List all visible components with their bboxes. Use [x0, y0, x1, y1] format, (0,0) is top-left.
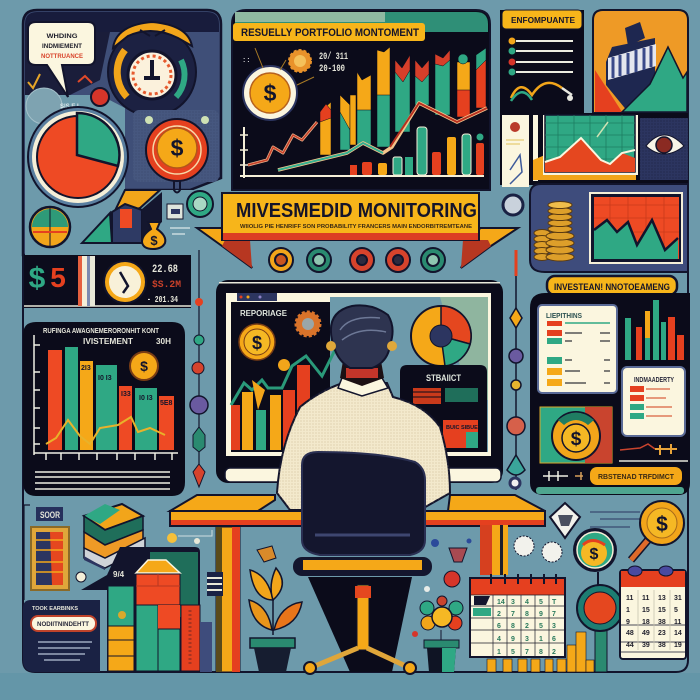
title: MIVESMEDID MONITORING	[236, 200, 477, 222]
plant right	[420, 596, 463, 672]
calendar center: 9	[511, 636, 515, 643]
calendar center: 5	[539, 599, 543, 606]
icon row	[269, 248, 445, 272]
calendar center: T	[552, 599, 557, 606]
coin picture: $	[571, 429, 582, 450]
icon: books stack	[84, 504, 145, 570]
panel: balance strip: $S.2M	[152, 279, 181, 291]
icon: money bag: $	[150, 233, 158, 248]
calendar center: 14	[497, 599, 505, 606]
coin picture	[540, 407, 612, 463]
table card	[538, 305, 617, 393]
calendar right: 31	[674, 595, 682, 602]
shirt	[277, 383, 450, 510]
desk leg left	[216, 527, 240, 672]
bar numbers: I0 I3	[98, 375, 112, 382]
screen coin	[239, 324, 275, 360]
screen panel: stbaiict: BUIC SIBUE	[446, 425, 478, 431]
calendar center: 2	[552, 649, 556, 656]
panel: building illustration	[593, 10, 688, 113]
bar numbers	[81, 365, 173, 407]
magnifier with coin	[573, 528, 617, 585]
calendar right: 23	[658, 630, 666, 637]
chart numbers: 20-100	[319, 64, 345, 75]
calendar center: 1	[497, 649, 501, 656]
calendar right: 9	[626, 619, 630, 626]
pill label	[590, 467, 682, 485]
bar strip	[487, 632, 594, 672]
panel: balance strip: 5	[50, 262, 66, 293]
footer lines	[35, 472, 170, 489]
magnifier with coin: $	[590, 546, 599, 563]
small marks	[26, 74, 109, 124]
panel: investment bar chart	[23, 322, 185, 496]
coin	[243, 48, 314, 120]
calendar center: 6	[552, 636, 556, 643]
panel: top left dashboard	[23, 10, 221, 255]
large magnifier: $	[656, 513, 668, 536]
panel: balance strip	[24, 255, 191, 308]
panel: balance strip: - 201.34	[147, 295, 178, 305]
axes	[34, 335, 178, 460]
mini bars	[625, 300, 684, 360]
bar numbers: I33	[121, 391, 131, 398]
calendar center: 4	[497, 636, 501, 643]
calendar right: 38	[658, 619, 666, 626]
calendar center: 5	[539, 623, 543, 630]
speech bubble: NOTTRUANCE	[41, 53, 84, 60]
coin	[130, 352, 158, 380]
coin: $	[264, 80, 277, 106]
chart titles: RUFINGA AWAGNEMERORONHIT KONT	[43, 328, 160, 335]
calendar center	[470, 574, 565, 657]
coin panel: $	[171, 135, 184, 161]
block chart: 9/4	[113, 570, 125, 579]
icon: ledger card	[31, 527, 69, 590]
calendar right: 15	[642, 607, 650, 614]
screen bars	[231, 350, 335, 450]
panel: balance strip: 22.68	[152, 264, 178, 276]
gear: : :	[243, 57, 250, 64]
card: indmaadernty: INDMAADERTY	[634, 377, 674, 384]
chair legs	[308, 577, 412, 672]
panel: text note	[23, 600, 100, 672]
small markers left	[76, 530, 276, 582]
panel: monitor chart row	[500, 113, 688, 187]
icon: house with roof chart	[82, 190, 162, 243]
calendar right: 49	[642, 630, 650, 637]
calendar right: 19	[674, 642, 682, 649]
chart numbers: 20/ 311	[319, 51, 348, 63]
subtitle: WIIOLIG PIE HENRIFF SON PROBABILITY FRANCERS MAIN ENDORBITREMTEANE	[240, 224, 472, 230]
calendar right: 11	[674, 619, 682, 626]
pill: NODIITNINDEHTT	[37, 621, 89, 628]
gear	[243, 50, 311, 72]
label: soor: SOOR	[40, 510, 60, 520]
label: ENFOMPUANTE	[511, 16, 576, 25]
calendar right: 44	[626, 642, 634, 649]
desk	[170, 495, 545, 672]
person at desk	[277, 305, 450, 510]
calendar center: 9	[539, 611, 543, 618]
bar numbers: 5E8	[160, 400, 173, 407]
head	[331, 305, 393, 368]
connector: left beads	[190, 250, 208, 487]
heading: right panel label: INVESTEAN! NNOTOEAMENG	[554, 282, 670, 293]
calendar center: 2	[525, 623, 529, 630]
calendar right: 1	[626, 607, 630, 614]
calendar center: 8	[525, 611, 529, 618]
label: soor	[24, 505, 63, 600]
bar numbers: 2I3	[81, 365, 91, 372]
panel: entries list	[500, 10, 584, 113]
coin stacks	[534, 202, 574, 261]
panel: text note: TOOK EARBINKS	[32, 606, 78, 612]
magnifier red lens	[577, 585, 623, 672]
connector: right beads	[503, 195, 525, 490]
armrest	[293, 557, 432, 576]
line chart	[533, 115, 638, 181]
calendar right: 11	[642, 595, 650, 602]
trend line	[46, 417, 165, 444]
table card: LIEPITHINS	[546, 313, 582, 320]
screen panel: stbaiict	[400, 365, 487, 452]
calendar right: 38	[658, 642, 666, 649]
icon: money bag	[142, 222, 165, 249]
note card	[502, 115, 529, 187]
calendar center: 3	[525, 636, 529, 643]
panel: investment report	[530, 293, 690, 495]
banner tail: right	[461, 228, 518, 268]
panel: portfolio chart	[232, 10, 490, 190]
calendar right: 5	[674, 607, 678, 614]
panel: coins and market chart	[530, 184, 688, 272]
list rows	[508, 38, 573, 76]
collar	[338, 378, 388, 396]
trend lines	[248, 103, 487, 170]
calendar right: 11	[626, 595, 634, 602]
calendar center: 7	[511, 611, 515, 618]
market chart	[590, 193, 682, 263]
speech bubble: WHDING	[46, 33, 78, 40]
icon: globe	[30, 207, 70, 247]
bars	[48, 347, 174, 450]
tall bars	[320, 47, 486, 155]
icon: diamond badge	[514, 503, 640, 562]
panel: balance strip: $	[29, 262, 46, 295]
monitor	[216, 280, 503, 483]
bar numbers: I0 I3	[139, 395, 153, 402]
calendar center: 5	[511, 649, 515, 656]
heading: chart label	[233, 23, 425, 41]
chart titles: 30H	[156, 337, 171, 346]
office chair	[293, 452, 432, 674]
calendar center: 1	[539, 636, 543, 643]
coin: $	[140, 358, 148, 374]
gear	[296, 312, 320, 336]
calendar right: 18	[642, 619, 650, 626]
calendar right: 48	[626, 630, 634, 637]
pill label: RBSTENAD TRFDIMCT	[598, 472, 674, 481]
calendar center: 4	[525, 599, 529, 606]
eye panel	[640, 118, 688, 180]
heading: chart label: RESUELLY PORTFOLIO MONTOMENT	[241, 27, 419, 39]
chair backrest	[302, 452, 425, 555]
calendar center: 3	[511, 599, 515, 606]
calendar center: 7	[552, 611, 556, 618]
calendar right: 15	[658, 607, 666, 614]
small markers center	[412, 538, 472, 637]
shirt shading	[277, 383, 450, 510]
calendar center: 8	[511, 623, 515, 630]
chart titles: IVISTEMENT	[83, 337, 133, 346]
plant left	[249, 568, 302, 672]
neck	[340, 355, 384, 386]
pluses	[543, 471, 583, 481]
block chart	[81, 547, 223, 672]
donut chart	[411, 306, 471, 366]
calendar right: 13	[658, 595, 666, 602]
calendar center: 3	[552, 623, 556, 630]
calendar right: 39	[642, 642, 650, 649]
pedestal	[304, 585, 416, 674]
calendar center: 7	[525, 649, 529, 656]
banner tail: left	[197, 228, 252, 268]
sparkline	[619, 444, 688, 461]
speech bubble: INDMIEMENT	[42, 43, 82, 50]
desk leg right	[480, 525, 508, 575]
calendar center: 2	[497, 611, 501, 618]
coin panel	[133, 110, 219, 192]
title banner	[222, 193, 479, 240]
icon: clock	[104, 261, 146, 303]
icon: alarm clock	[108, 22, 196, 116]
calendar center: 8	[539, 649, 543, 656]
squiggle	[511, 83, 573, 101]
small badges	[167, 191, 213, 234]
speech bubble	[28, 22, 95, 97]
large magnifier	[631, 501, 684, 560]
card: indmaadernty	[622, 367, 685, 436]
small marks: S|S E L	[60, 104, 81, 110]
calendar center: 6	[497, 623, 501, 630]
low bars	[350, 127, 484, 175]
calendar right	[620, 566, 686, 659]
screen coin: $	[252, 333, 262, 353]
axes	[240, 127, 484, 178]
pie chart	[28, 107, 128, 207]
calendar right: 14	[674, 630, 682, 637]
chart numbers	[319, 51, 348, 75]
screen panel: stbaiict: STBAIICT	[426, 373, 461, 383]
heading: right panel label	[547, 276, 677, 295]
chart titles	[43, 328, 171, 346]
screen label: REPORIAGE	[240, 309, 288, 318]
